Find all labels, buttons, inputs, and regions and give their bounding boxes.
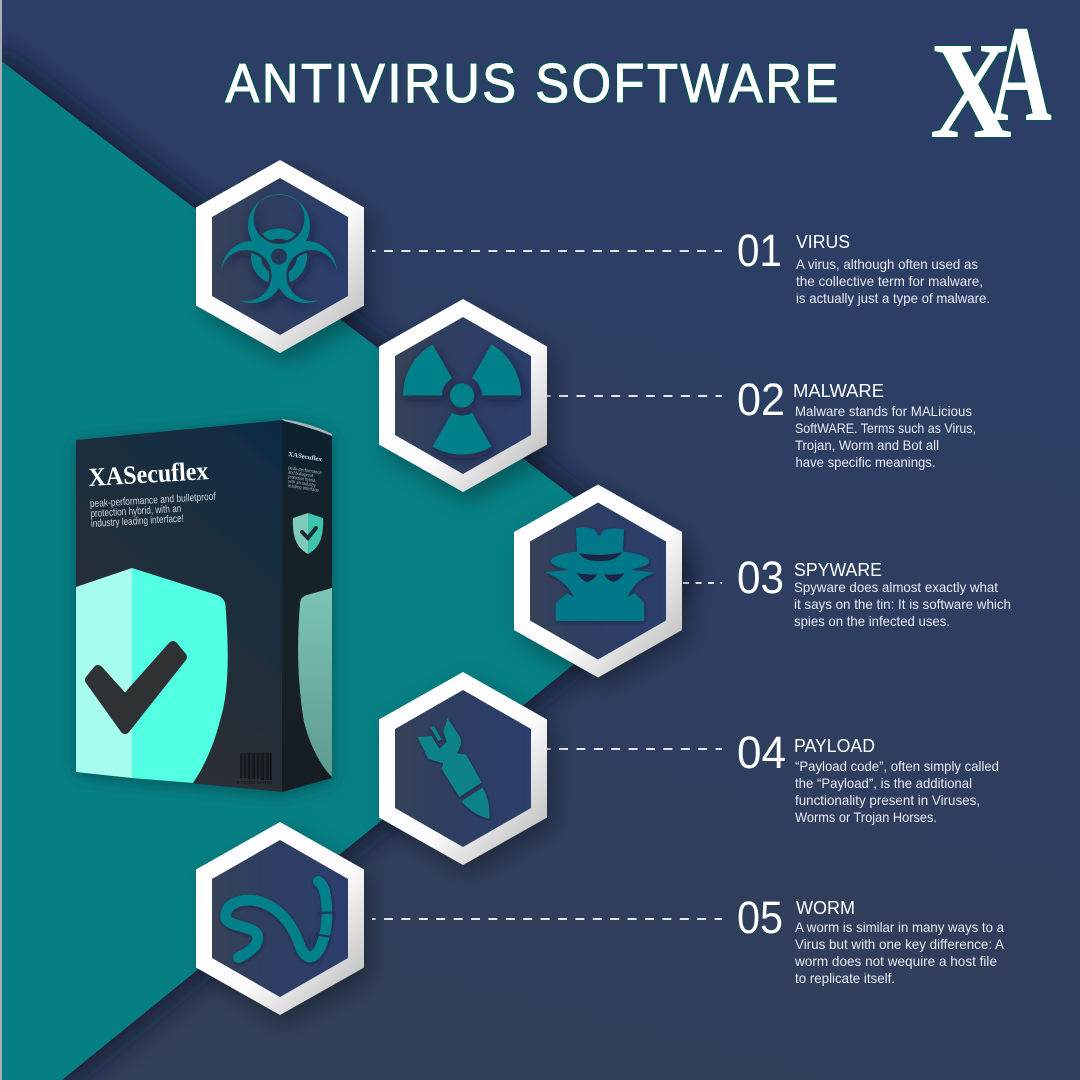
icon: spy xyxy=(545,527,656,621)
side large shield xyxy=(298,588,332,777)
description malware: SoftWARE. Terms such as Virus, xyxy=(795,420,976,436)
box front face xyxy=(76,420,282,792)
number 01: 01 xyxy=(737,225,782,276)
description malware: have specific meanings. xyxy=(796,454,936,470)
heading worm: WORM xyxy=(796,898,855,918)
barcode: 9 781861 924789 xyxy=(237,780,272,784)
description virus: is actually just a type of malware. xyxy=(796,290,990,306)
box tagline: protection hybrid, with an xyxy=(90,503,182,520)
box tagline: industry leading interface! xyxy=(91,513,184,530)
number 03: 03 xyxy=(737,552,784,603)
item 05: worm xyxy=(737,892,1005,986)
description payload: Worms or Trojan Horses. xyxy=(795,809,937,825)
heading spyware: SPYWARE xyxy=(794,560,882,580)
number 05: 05 xyxy=(737,892,783,943)
teal arrow panel xyxy=(0,0,680,1080)
description worm: A worm is similar in many ways to a xyxy=(795,919,1004,935)
description payload: “Payload code”, often simply called xyxy=(795,758,999,774)
title: ANTIVIRUS SOFTWARE xyxy=(226,53,838,114)
description malware: Malware stands for MALicious xyxy=(795,403,972,419)
logo: XA monogram xyxy=(930,0,1052,168)
connector 02 xyxy=(547,395,722,397)
description worm: Virus but with one key difference: A xyxy=(795,936,1005,952)
side panel text: peak-performance xyxy=(288,465,322,476)
description malware xyxy=(795,403,976,470)
hexagon 03: spy xyxy=(514,484,682,678)
description spyware: Spyware does almost exactly what xyxy=(794,579,998,595)
front check mark xyxy=(90,646,182,729)
item 01: virus xyxy=(737,225,990,306)
box tagline: peak-performance and bulletproof xyxy=(89,491,216,510)
icon: biohazard xyxy=(221,194,337,307)
description payload: the “Payload”, is the additional xyxy=(795,775,972,791)
hexagon 02: radiation xyxy=(379,299,547,492)
hexagon 04: bomb xyxy=(379,672,547,865)
number 02: 02 xyxy=(737,374,785,425)
side panel text: with an industry xyxy=(288,479,317,489)
description spyware: it says on the tin: It is software which xyxy=(794,596,1011,612)
item 02: malware xyxy=(737,374,976,470)
box side face xyxy=(282,420,332,792)
description payload: functionality present in Viruses, xyxy=(795,792,980,808)
side small shield xyxy=(293,513,323,554)
heading payload: PAYLOAD xyxy=(794,736,875,756)
description virus xyxy=(796,256,990,306)
side panel text: and bulletproof xyxy=(288,470,314,479)
heading malware: MALWARE xyxy=(793,381,884,401)
front shield xyxy=(76,568,228,783)
side panel name: XASecuflex xyxy=(288,451,323,463)
description spyware: spies on the infected uses. xyxy=(794,613,950,629)
description worm: to replicate itself. xyxy=(795,970,895,986)
side panel text xyxy=(288,465,322,494)
side panel text: protection hybrid, xyxy=(288,474,316,484)
logo: XA monogram: A xyxy=(990,0,1052,150)
box name: XASecuflex xyxy=(88,456,209,492)
box top flap highlight xyxy=(282,419,332,436)
connector 01 xyxy=(372,250,722,252)
box tagline xyxy=(89,491,217,530)
description spyware xyxy=(794,579,1011,629)
icon: worm xyxy=(226,882,334,958)
description malware: Trojan, Worm and Bot all xyxy=(795,437,939,453)
description virus: the collective term for malware, xyxy=(796,273,983,289)
connector 04 xyxy=(547,748,722,750)
connector 05 xyxy=(372,918,722,920)
side panel text: leading interface xyxy=(288,483,320,494)
logo: XA monogram: X xyxy=(930,15,1012,168)
description worm xyxy=(794,919,1005,986)
description payload xyxy=(795,758,999,825)
hexagon 05: worm xyxy=(196,822,364,1015)
item 03: spyware xyxy=(737,552,1011,629)
connector 03 xyxy=(683,582,722,584)
hexagon 01: biohazard xyxy=(196,160,364,353)
icon: bomb xyxy=(417,718,489,819)
product box xyxy=(76,419,332,792)
heading virus: VIRUS xyxy=(796,232,850,252)
description virus: A virus, although often used as xyxy=(796,256,978,272)
description worm: worm does not wequire a host file xyxy=(794,953,997,969)
icon: radiation xyxy=(403,344,536,472)
number 04: 04 xyxy=(737,727,786,778)
item 04: payload xyxy=(737,727,999,825)
barcode xyxy=(237,753,272,784)
